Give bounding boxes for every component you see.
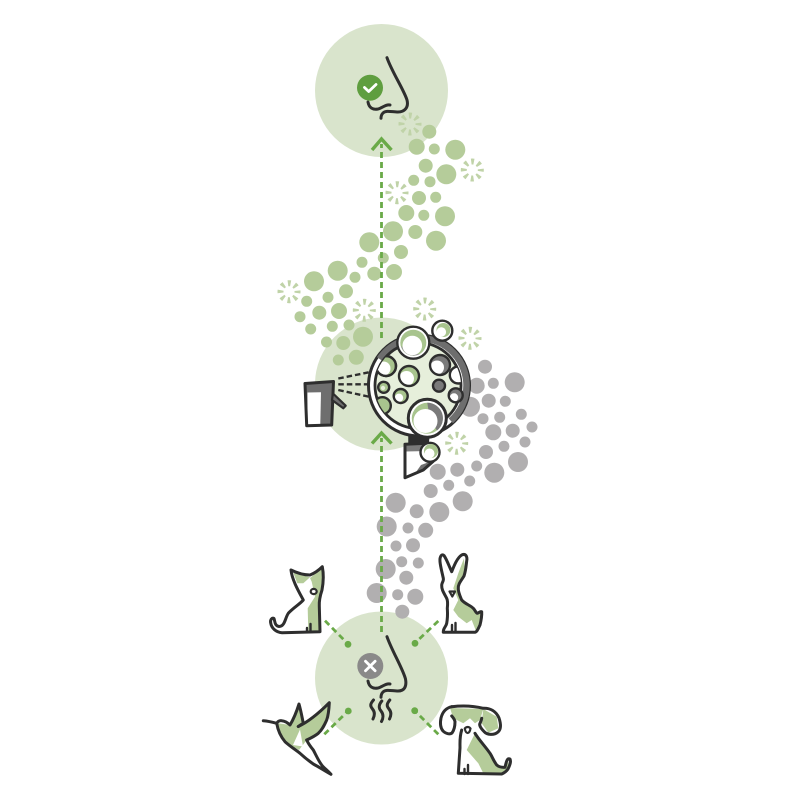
icon: nose with cross badge and steam <box>357 637 406 722</box>
grey odour particles <box>367 360 538 619</box>
icon: steam <box>371 700 391 722</box>
icon: molecular filter disc <box>368 335 470 436</box>
spray dashes <box>338 372 369 397</box>
molecule: large bottom pore <box>408 399 446 437</box>
icon: filter magnifier base <box>405 433 440 478</box>
arrow: upper dashed arrow to top nose <box>372 139 392 338</box>
bottom circle background <box>315 612 448 744</box>
icon: spray bottle <box>305 372 369 426</box>
arrow: lower dashed arrow to filter <box>372 433 392 632</box>
molecule: small top pore <box>432 321 452 341</box>
sparkle bursts <box>280 116 481 452</box>
middle circle background <box>315 318 448 450</box>
icon: dog <box>441 706 510 774</box>
icon: cat <box>271 567 323 633</box>
green odour particles <box>294 125 465 366</box>
molecule: large top pore <box>397 327 429 359</box>
leader: dog <box>411 707 438 734</box>
top circle background <box>315 24 448 157</box>
icon: nose with check badge <box>357 58 407 118</box>
icon: rabbit <box>440 554 482 632</box>
leader: cat <box>325 621 351 648</box>
leader: hummingbird <box>324 708 352 734</box>
icon: hummingbird <box>263 703 331 774</box>
filter pores <box>374 356 467 414</box>
leader: rabbit <box>412 621 438 647</box>
